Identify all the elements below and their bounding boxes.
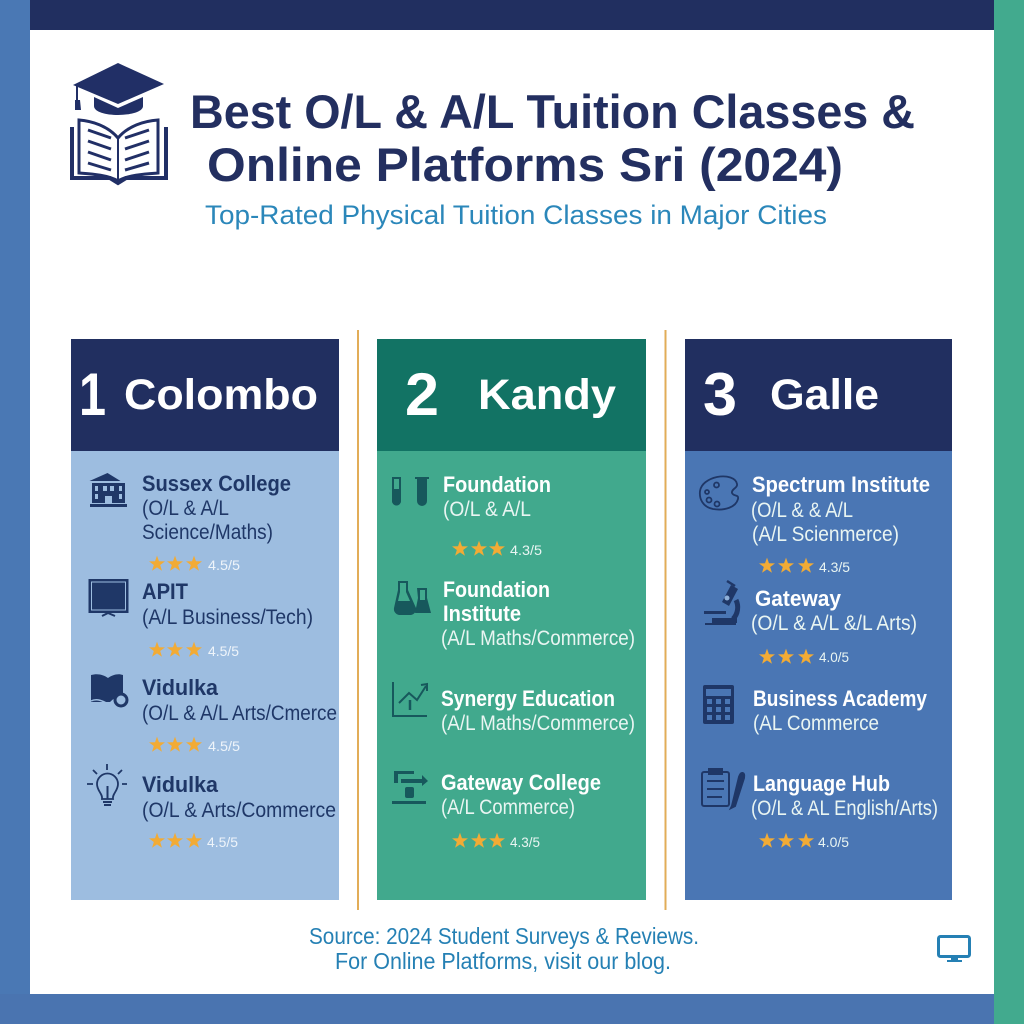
item: Vidulka 2: 4.5/5 — [207, 834, 238, 850]
icon: school building — [90, 473, 127, 507]
item: APIT: 4.5/5 — [208, 643, 239, 659]
item: Language Hub — [751, 771, 938, 850]
icon: direction sign — [392, 771, 428, 804]
item: Gateway College: (A/L Commerce) — [441, 796, 575, 819]
item: APIT — [142, 579, 313, 659]
item: Vidulka 1: 4.5/5 — [208, 738, 240, 754]
item: Vidulka 2 — [142, 772, 336, 850]
title: Best O/L & A/L Tuition Classes & — [190, 85, 915, 138]
icon: flasks — [394, 581, 431, 615]
item: Gateway: Gateway — [755, 586, 842, 611]
item: Spectrum Institute: Spectrum Institute — [752, 472, 930, 497]
item: Synergy Education — [441, 686, 635, 735]
item: APIT: APIT — [142, 579, 189, 604]
item: APIT: (A/L Business/Tech) — [142, 606, 313, 629]
panel header: Galle — [685, 339, 952, 451]
icon: line chart — [393, 682, 427, 716]
item: Sussex College — [142, 471, 291, 573]
item: Vidulka 2: (O/L & Arts/Commerce — [142, 799, 336, 822]
item: Foundation Institute: (A/L Maths/Commerce) — [441, 627, 635, 650]
item: Vidulka 2: Vidulka — [142, 772, 219, 797]
title: Online Platforms Sri (2024) — [207, 138, 843, 191]
footer source note — [309, 923, 699, 974]
item: Gateway: 4.0/5 — [819, 649, 849, 665]
footer source note: Source: 2024 Student Surveys & Reviews. — [309, 923, 699, 949]
item: Foundation: Foundation — [443, 472, 551, 497]
panel header: Galle: Galle — [770, 371, 879, 419]
item: Business Academy: (AL Commerce — [753, 712, 879, 735]
item: Foundation — [443, 472, 551, 558]
frame: top band — [30, 0, 994, 30]
item: Business Academy: Business Academy — [753, 686, 928, 711]
footer source note: For Online Platforms, visit our blog. — [335, 948, 671, 974]
frame: left band — [0, 0, 30, 1024]
item: Foundation Institute: Foundation — [443, 577, 550, 602]
subtitle: Top-Rated Physical Tuition Classes in Major Cities — [205, 200, 827, 230]
panel header: Galle: 3 — [703, 361, 737, 428]
icon: test tubes — [392, 478, 429, 506]
icon: display board — [90, 580, 128, 616]
icon: graduation cap and open book — [72, 63, 166, 183]
item: Gateway College — [441, 770, 601, 850]
item: Spectrum Institute: (O/L & & A/L — [751, 499, 853, 522]
item: Spectrum Institute: 4.3/5 — [819, 559, 850, 575]
panel header: Colombo: 1 — [79, 361, 106, 428]
item: Business Academy — [753, 686, 928, 735]
panel: Colombo — [71, 339, 339, 900]
frame: bottom band — [0, 994, 994, 1024]
item: Gateway: (O/L & A/L &/L Arts) — [751, 612, 917, 635]
icon: microscope — [704, 581, 738, 625]
item: Sussex College: (O/L & A/L — [142, 497, 229, 520]
item: Gateway College: 4.3/5 — [510, 834, 540, 850]
icon: computer monitor — [938, 936, 970, 962]
item: Spectrum Institute: (A/L Scienmerce) — [752, 523, 899, 546]
panel header: Colombo: Colombo — [124, 371, 318, 419]
panel header: Kandy: 2 — [405, 361, 439, 428]
item: Foundation Institute — [441, 577, 635, 650]
panel header: Kandy — [377, 339, 646, 451]
icon: paint palette — [700, 476, 738, 510]
panel: Galle — [685, 339, 952, 900]
divider — [357, 330, 359, 910]
item: Sussex College: Sussex College — [142, 471, 291, 496]
title — [190, 85, 915, 191]
item: Synergy Education: (A/L Maths/Commerce) — [441, 712, 635, 735]
item: Language Hub: 4.0/5 — [818, 834, 849, 850]
panel header: Kandy: Kandy — [478, 371, 616, 419]
item: Language Hub: (O/L & AL English/Arts) — [751, 797, 938, 820]
divider — [664, 330, 666, 910]
item: Vidulka 1: Vidulka — [142, 675, 219, 700]
icon: light bulb — [87, 764, 127, 805]
item: Foundation: (O/L & A/L — [443, 498, 531, 521]
frame: right band — [994, 0, 1024, 1024]
icon: calculator — [703, 685, 734, 724]
icon: book with magnifier — [91, 674, 127, 706]
item: Spectrum Institute — [751, 472, 930, 575]
panel: Kandy — [377, 339, 646, 900]
item: Sussex College: 4.5/5 — [208, 557, 240, 573]
item: Language Hub: Language Hub — [753, 771, 890, 796]
item: Foundation Institute: Institute — [443, 601, 521, 626]
item: Gateway College: Gateway College — [441, 770, 601, 795]
item: Foundation: 4.3/5 — [510, 542, 542, 558]
item: Vidulka 1 — [142, 675, 337, 754]
panel header: Colombo — [71, 339, 339, 451]
item: Synergy Education: Synergy Education — [441, 686, 615, 711]
item: Vidulka 1: (O/L & A/L Arts/Cmerce — [142, 702, 337, 725]
item: Gateway — [751, 586, 917, 665]
icon: clipboard and pen — [702, 769, 744, 808]
item: Sussex College: Science/Maths) — [142, 521, 273, 544]
